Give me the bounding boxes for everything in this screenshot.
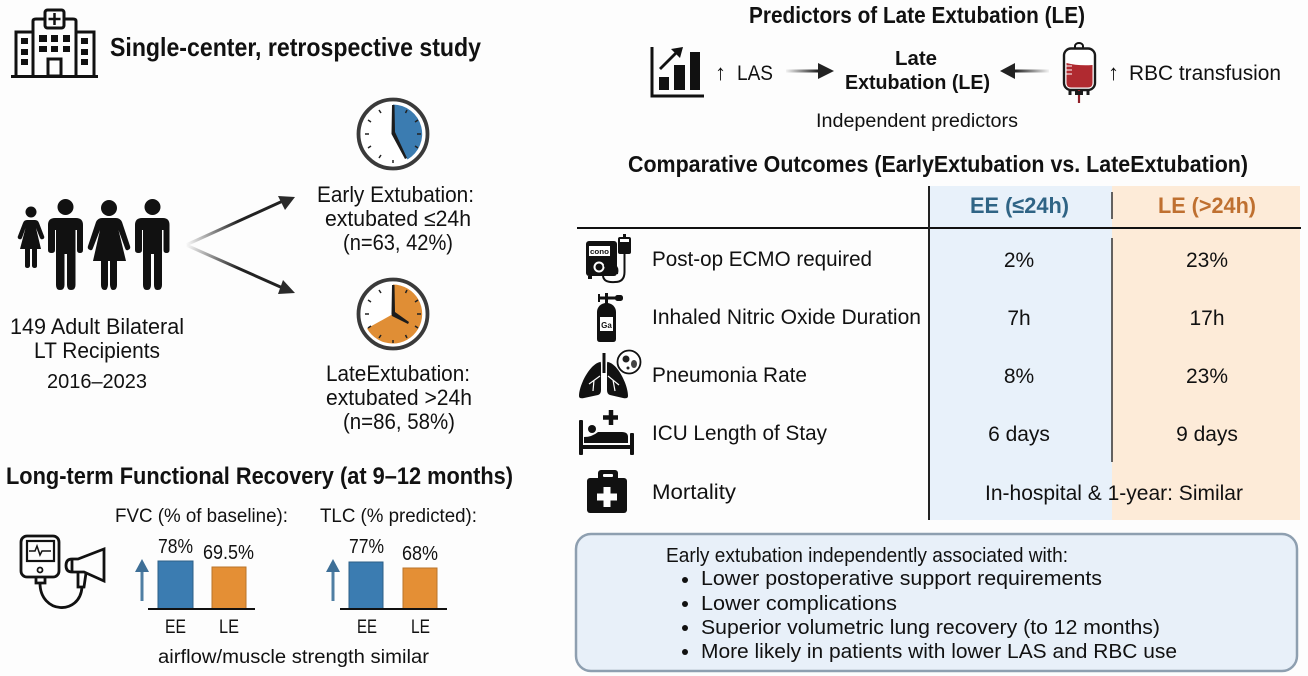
icon: lungs with pathogen: [579, 350, 640, 398]
figure: man: [48, 199, 83, 290]
callout: conclusions: [576, 534, 1297, 671]
header: LE: LE (>24h): [1158, 193, 1256, 218]
heading: study design: Single-center, retrospective study: [110, 32, 481, 62]
chart: FVC: LE: [219, 617, 239, 638]
text: study population: 2016–2023: [47, 371, 147, 393]
figure: child: [18, 206, 44, 268]
text: early extubation group: (n=63, 42%): [343, 230, 453, 255]
icon: patient group: [18, 199, 169, 290]
text: late extubation centre: Extubation (LE): [845, 72, 990, 94]
text: early extubation group: extubated ≤24h: [325, 206, 471, 231]
text: late extubation group: [326, 361, 472, 434]
bullet list: [682, 567, 1177, 663]
label: ECMO: Post-op ECMO required: [652, 248, 872, 271]
arrow: RBC to late extubation: [1000, 63, 1049, 79]
icon: gas cylinder: Ga: [601, 321, 612, 330]
table: outcomes: [577, 186, 1301, 520]
chart: TLC: [320, 506, 477, 638]
label: ICU stay: ICU Length of Stay: [652, 422, 827, 445]
chart: TLC: 68%: [402, 543, 438, 565]
arrow: LAS to late extubation: [786, 63, 834, 79]
text: LAS: ↑: [715, 60, 726, 85]
value: NO LE: 17h: [1189, 307, 1225, 330]
chart: TLC: EE: [357, 617, 377, 638]
arrow: to late extubation: [186, 245, 295, 294]
icon: medical kit: [587, 470, 627, 513]
label: pneumonia: Pneumonia Rate: [652, 364, 807, 387]
heading: predictors: Predictors of Late Extubation (LE): [749, 2, 1085, 28]
text: study population: [10, 314, 184, 393]
bar: FVC LE: [212, 567, 246, 609]
figure: man 2: [135, 199, 170, 290]
arrow: TLC up: [326, 559, 340, 601]
column: LE background: [1112, 186, 1300, 520]
icon: clock early: [358, 100, 428, 168]
label: TLC: TLC (% predicted):: [320, 506, 477, 527]
value: pneumonia LE: 23%: [1186, 365, 1228, 388]
value: mortality: In-hospital & 1-year: Similar: [985, 482, 1243, 505]
value: NO EE: 7h: [1007, 307, 1031, 330]
text: LAS: [715, 60, 773, 85]
heading: long-term recovery: Long-term Functional Recovery (at 9–12 months): [6, 463, 513, 490]
chart: FVC: [115, 506, 288, 638]
chart: FVC: EE: [165, 617, 186, 638]
arrow: FVC up: [135, 559, 149, 601]
bullet list: Lower complications: [701, 592, 897, 615]
text: RBC transfusion: RBC transfusion: [1129, 62, 1281, 85]
value: ICU LE: 9 days: [1176, 423, 1238, 446]
label: FVC: FVC (% of baseline):: [115, 506, 288, 527]
text: late extubation group: extubated >24h: [326, 385, 472, 410]
icon: gas cylinder: [597, 293, 623, 342]
column: EE background: [930, 186, 1112, 520]
icon: hospital bed: [579, 410, 634, 455]
chart: TLC: 77%: [349, 536, 384, 558]
label: nitric oxide: Inhaled Nitric Oxide Duration: [652, 306, 921, 329]
icon: spirometer: [21, 536, 104, 608]
value: ICU EE: 6 days: [988, 423, 1050, 446]
icon: clock late: [358, 280, 428, 348]
chart: FVC: 69.5%: [203, 542, 254, 564]
icon: ECMO machine: cono: [590, 247, 609, 256]
icon: hospital: [11, 10, 98, 76]
value: ECMO LE: 23%: [1186, 249, 1228, 272]
text: LAS: LAS: [737, 62, 773, 85]
bullet list: Lower postoperative support requirements: [701, 567, 1102, 590]
text: late extubation centre: [845, 48, 990, 94]
chart: FVC: 78%: [158, 536, 193, 558]
icon: blood bag: [1064, 43, 1095, 103]
bullet list: Superior volumetric lung recovery (to 12 months): [701, 616, 1160, 639]
figure: woman: [88, 200, 130, 290]
chart: TLC: LE: [411, 617, 430, 638]
bar: FVC EE: [158, 561, 193, 609]
text: recovery note: airflow/muscle strength similar: [158, 647, 430, 668]
text: late extubation group: (n=86, 58%): [343, 409, 455, 434]
value: ECMO EE: 2%: [1004, 249, 1034, 272]
value: pneumonia EE: 8%: [1004, 365, 1034, 388]
text: RBC transfusion: ↑: [1108, 60, 1119, 85]
bar: TLC EE: [349, 562, 383, 609]
header: EE: EE (≤24h): [970, 193, 1069, 218]
icon: ECMO machine: [586, 234, 631, 282]
text: study population: LT Recipients: [34, 338, 160, 363]
heading: comparative outcomes: Comparative Outcomes (EarlyExtubation vs. LateExtubation): [628, 151, 1248, 177]
icon: rising bar chart: [652, 47, 704, 96]
text: late extubation group: LateExtubation:: [326, 361, 470, 386]
text: early extubation group: [317, 182, 474, 255]
text: late extubation centre: Late: [895, 48, 937, 70]
text: independent predictors: Independent predictors: [816, 110, 1018, 132]
text: conclusion lead: Early extubation independently associated with:: [666, 544, 1068, 567]
arrow: to early extubation: [186, 196, 295, 245]
bullet list: More likely in patients with lower LAS and RBC use: [701, 640, 1177, 663]
text: study population: 149 Adult Bilateral: [10, 314, 184, 339]
label: mortality: Mortality: [652, 481, 737, 504]
text: early extubation group: Early Extubation:: [317, 182, 474, 207]
bar: TLC LE: [403, 568, 437, 609]
